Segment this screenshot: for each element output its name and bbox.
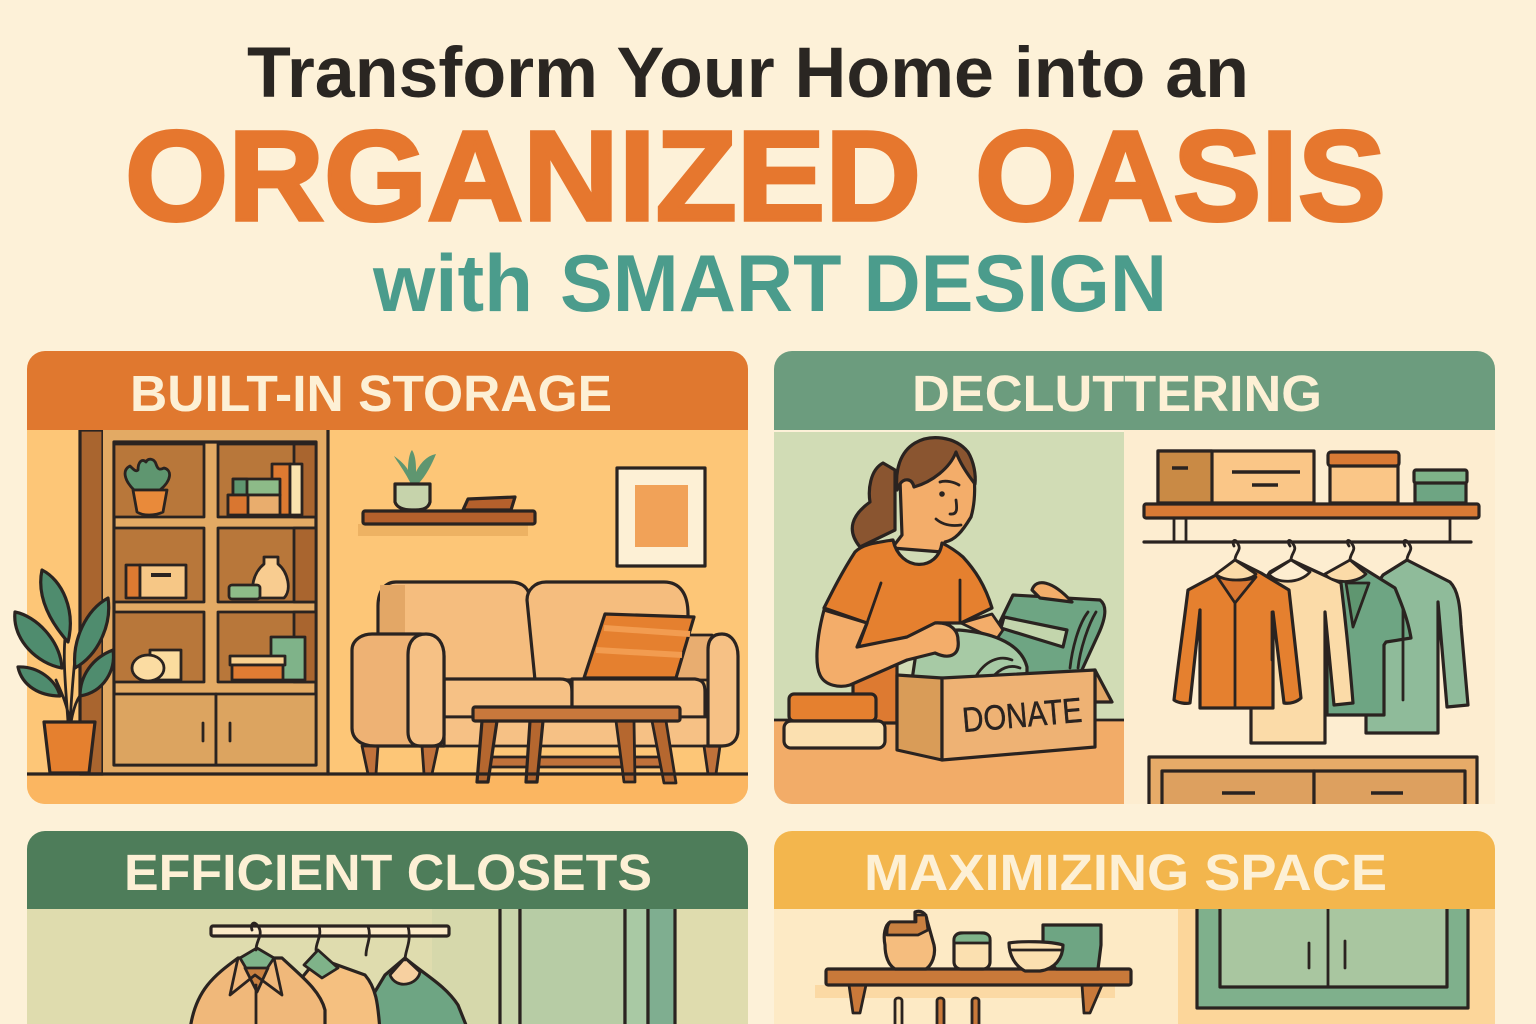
header: maximizing space: MAXIMIZING SPACE bbox=[864, 844, 1387, 901]
title line: Transform Your Home into an: Transform Your Home into an bbox=[247, 34, 1249, 113]
clothes in box bbox=[817, 583, 1105, 686]
hanging clothes bbox=[1174, 540, 1468, 743]
wardrobe shelf and rail bbox=[1144, 504, 1479, 542]
panel: decluttering bbox=[774, 351, 1495, 817]
panel: built-in storage bbox=[15, 351, 748, 804]
dresser bbox=[1147, 755, 1479, 804]
closet door bbox=[500, 905, 675, 1024]
coffee table bbox=[473, 707, 680, 783]
illustration: living room with built-in shelves bbox=[15, 430, 748, 804]
orange cushion bbox=[584, 614, 694, 678]
title line: ORGANIZED OASIS: ORGANIZED bbox=[125, 105, 921, 248]
panel: maximizing space bbox=[774, 831, 1495, 1024]
potted plant bbox=[15, 570, 113, 773]
wall storage boxes bbox=[1158, 451, 1467, 503]
built-in bookcase bbox=[80, 430, 328, 774]
illustration: kitchen storage bbox=[774, 905, 1495, 1024]
hanging utensils bbox=[895, 998, 979, 1024]
title line: with SMART DESIGN: SMART DESIGN bbox=[560, 239, 1167, 329]
sofa bbox=[352, 582, 738, 774]
wall shelf with plant and book bbox=[358, 450, 535, 536]
header: efficient closets bbox=[27, 831, 748, 909]
shelf objects bbox=[125, 459, 305, 681]
header: built-in storage bbox=[27, 351, 748, 430]
header: built-in storage: BUILT-IN STORAGE bbox=[130, 365, 612, 422]
panel: efficient closets bbox=[27, 831, 748, 1024]
folded clothes stack bbox=[784, 694, 885, 748]
donate box: DONATE bbox=[961, 691, 1084, 740]
wall shelf with jars bbox=[815, 911, 1131, 1013]
woman bbox=[824, 438, 992, 723]
title line: ORGANIZED OASIS: OASIS bbox=[975, 105, 1386, 248]
header: decluttering: DECLUTTERING bbox=[912, 365, 1322, 422]
header: maximizing space bbox=[774, 831, 1495, 909]
illustration: sorting clothes and tidy wardrobe bbox=[774, 430, 1495, 817]
header: decluttering bbox=[774, 351, 1495, 430]
illustration: closet bbox=[27, 905, 748, 1024]
wall cabinet bbox=[1197, 905, 1468, 1008]
hangers and shirts bbox=[190, 923, 468, 1024]
title line: ORGANIZED OASIS bbox=[125, 105, 1386, 248]
donate box bbox=[897, 670, 1112, 760]
title line: with SMART DESIGN: with bbox=[372, 239, 533, 329]
title bbox=[125, 34, 1386, 329]
arm and hand bbox=[817, 610, 958, 686]
header: efficient closets: EFFICIENT CLOSETS bbox=[124, 844, 652, 901]
closet rail bbox=[211, 926, 449, 936]
framed picture bbox=[617, 468, 705, 566]
